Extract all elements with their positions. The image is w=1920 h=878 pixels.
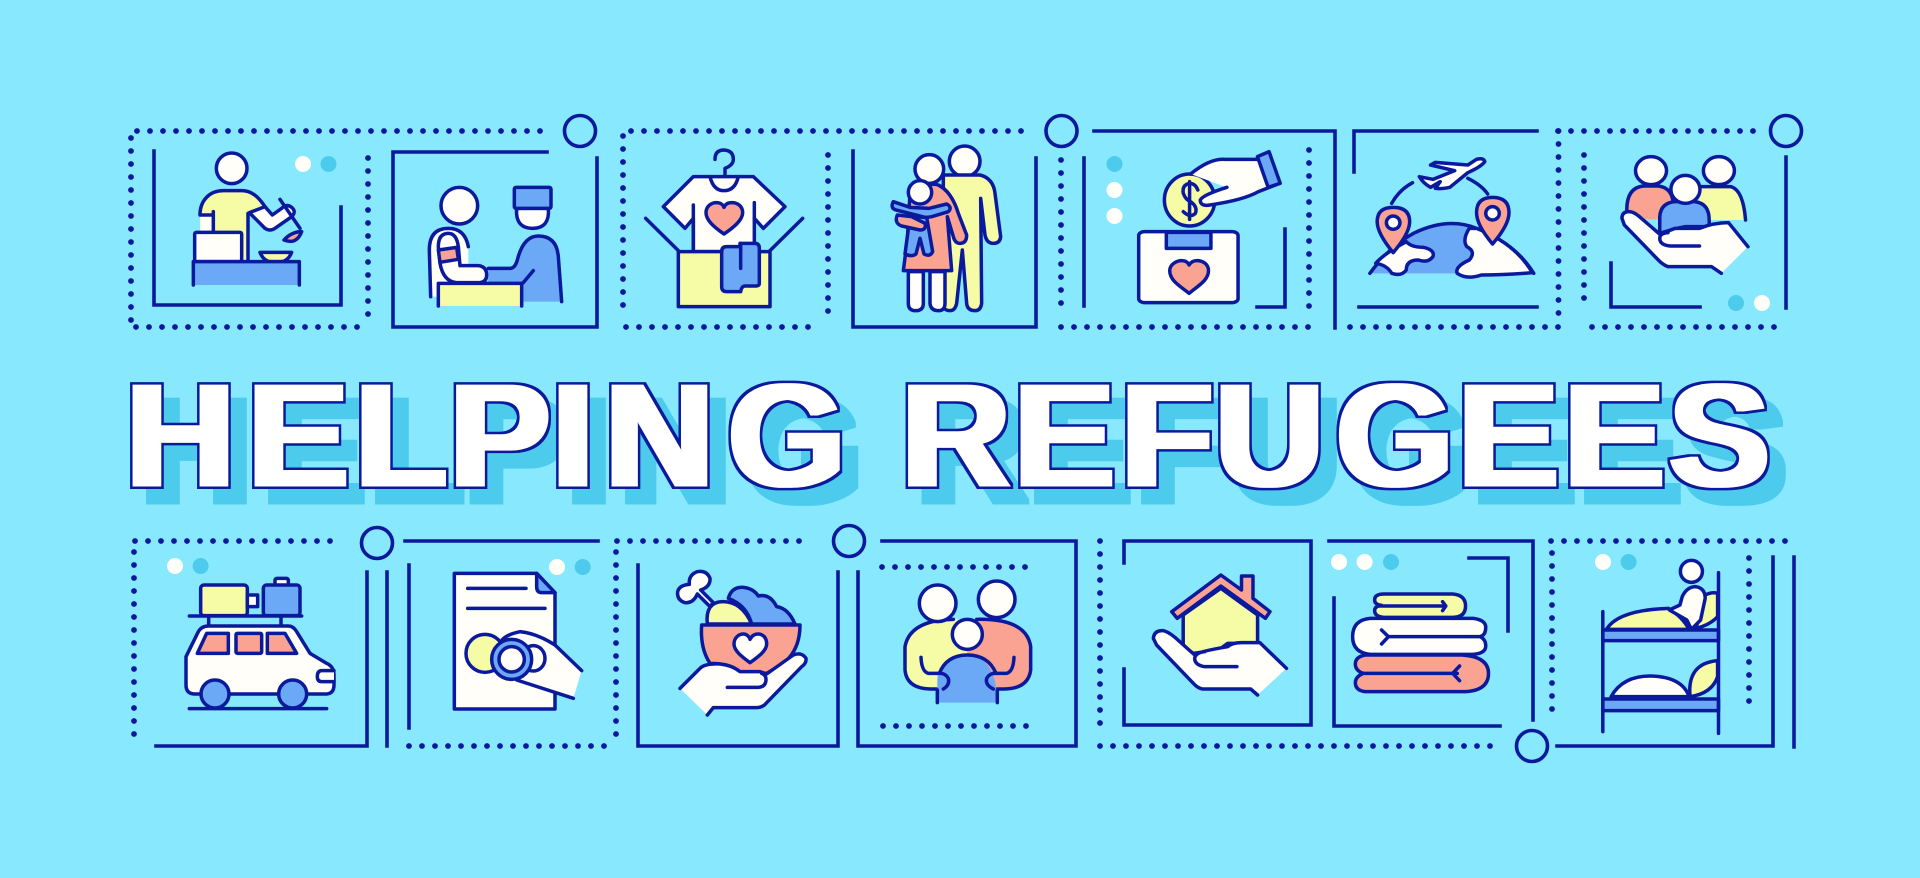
icon: plane over globe with pins <box>1370 159 1534 277</box>
panel: legal documents <box>405 541 616 746</box>
title: HELPING REFUGEES <box>126 353 1770 518</box>
icon: coin in donation box <box>1139 152 1280 303</box>
icon: house in hand <box>1153 575 1286 695</box>
panel: food preparation <box>131 116 596 327</box>
panel: family unity <box>858 541 1076 746</box>
panel: housing <box>1100 541 1499 746</box>
panel: shelter beds <box>1551 541 1794 747</box>
icon: person cooking <box>193 153 302 285</box>
icon: bunk bed <box>1603 560 1719 733</box>
panel: relocation <box>1350 131 1559 327</box>
panel: family embrace <box>853 146 1036 327</box>
icon: hugging family <box>892 146 1001 311</box>
icon: bowl of food in hand <box>678 571 806 715</box>
panel: food support <box>617 526 864 746</box>
panel: money donation <box>1061 131 1335 328</box>
panel: family support <box>1558 116 1802 327</box>
icon: folded towels <box>1353 594 1488 692</box>
icon: doctor and patient <box>429 187 562 306</box>
icon: family in hand <box>1622 157 1748 273</box>
title: HELPING REFUGEES <box>142 368 1786 534</box>
icon: parents and child <box>905 581 1031 703</box>
panel: clothing donation <box>623 116 1077 327</box>
panel: bedding <box>1329 541 1548 762</box>
panel: medical help <box>393 152 597 327</box>
panel: transport <box>134 528 392 746</box>
icon: van with luggage <box>186 578 334 709</box>
icon: document with stamp <box>454 573 582 709</box>
icon: shirt in box <box>646 150 803 307</box>
